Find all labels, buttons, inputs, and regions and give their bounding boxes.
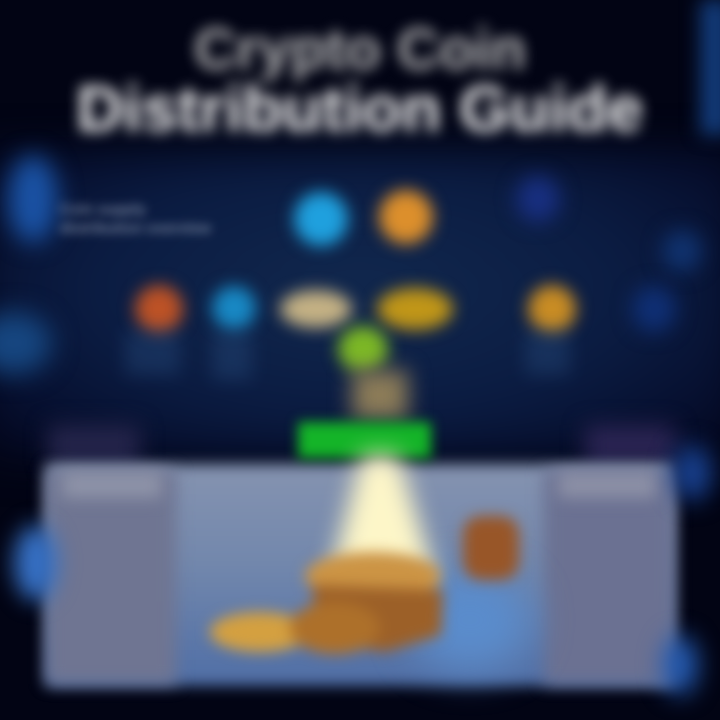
icon: pile of coins	[202, 542, 454, 664]
coin: main stack	[313, 585, 443, 652]
icon: dark blue token right	[632, 286, 676, 332]
coin: upper slab	[305, 552, 441, 600]
text block: left description: Coin supply	[60, 201, 146, 218]
background glow	[0, 150, 720, 460]
icon: lower right blue blob	[662, 635, 698, 695]
panel: main base	[46, 464, 674, 686]
icon: left blue blob	[14, 525, 58, 601]
icon: dark blue token top right	[516, 176, 560, 222]
icon: yellow coin	[377, 288, 453, 330]
icon: dark blue token far right	[662, 230, 702, 272]
text block: left description	[57, 200, 214, 238]
bar: green band	[298, 422, 431, 458]
title: Distribution Guide	[77, 72, 643, 145]
beam: beige column	[352, 370, 408, 420]
text block: left column heading	[62, 472, 162, 498]
beam: bright light cone	[318, 436, 448, 580]
text block: token captions	[122, 322, 574, 383]
icon: beige coin	[280, 290, 352, 328]
icon: red orange token	[135, 285, 183, 333]
icon: top right accent	[700, 0, 720, 135]
icon: left blue badge	[8, 155, 58, 243]
chart: centre lower blue glow	[410, 570, 530, 670]
icon: orange token right	[528, 285, 576, 333]
coin: front coin	[290, 602, 380, 654]
title: Crypto Coin	[194, 17, 526, 82]
title	[69, 17, 651, 145]
icon: left edge blue shape	[0, 312, 52, 374]
text block: left description: distribution overview	[60, 220, 211, 237]
icon: cyan token	[294, 192, 348, 246]
panel: right column	[544, 470, 674, 684]
text block: right column heading	[558, 472, 658, 498]
coin: left flat coin	[210, 612, 310, 652]
panel: left column	[46, 470, 176, 684]
icon: brown coin cube	[463, 516, 519, 580]
icon: right blue blob	[672, 445, 712, 501]
icon: green token	[338, 326, 388, 372]
icon: cyan small token	[212, 286, 256, 330]
icon: orange token	[379, 190, 433, 244]
